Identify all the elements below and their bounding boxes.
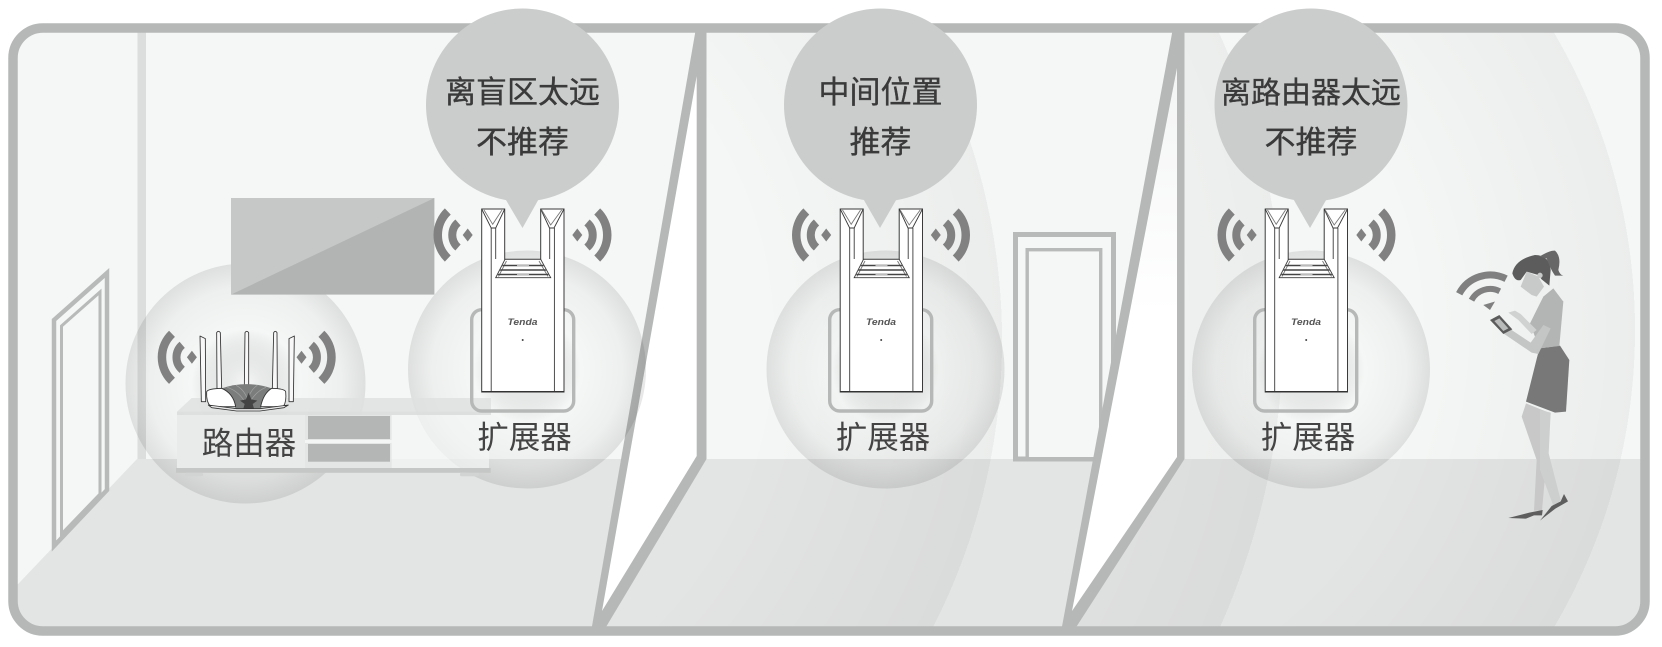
extender room 3: plug <box>1255 310 1357 411</box>
speech bubble: middle position <box>784 8 977 228</box>
speech bubble: too far from blind spot <box>426 8 619 228</box>
speech bubble: too far from router: 不推荐 <box>1264 125 1358 160</box>
extender room 2: wifi signal <box>796 212 966 258</box>
extender room 3: wifi signal <box>1222 212 1391 258</box>
extender room 2: device <box>840 209 922 392</box>
speech bubble: middle position: 推荐 <box>850 125 912 160</box>
extender room 3: device <box>1265 209 1348 392</box>
wall-mounted TV <box>231 198 434 295</box>
coverage sphere: extender room 1 <box>408 250 646 488</box>
door: left room <box>54 273 107 546</box>
signal range arc: middle room <box>916 142 1002 626</box>
speech bubble: too far from router <box>1214 8 1408 228</box>
speech bubble: too far from blind spot: 不推荐 <box>476 125 569 160</box>
speech bubble: too far from router: 离路由器太远 <box>1221 77 1401 110</box>
label: extender room 2: 扩展器 <box>836 419 930 455</box>
router <box>200 331 294 411</box>
coverage sphere: extender room 3 <box>1192 250 1430 488</box>
label: router: 路由器 <box>202 425 296 461</box>
extender room 1: device: Tenda <box>508 317 538 327</box>
signal range arcs: right room <box>1184 33 1635 626</box>
TV stand <box>176 398 491 476</box>
divider between rooms 1 and 2 <box>591 28 706 632</box>
icon: phone wifi signal <box>1459 275 1506 310</box>
speech bubble: too far from blind spot: 离盲区太远 <box>445 75 600 110</box>
wall column room 1 <box>138 28 146 459</box>
router wifi signal icon <box>162 334 331 381</box>
extender room 1: device <box>482 209 564 392</box>
extender room 3: device: Tenda <box>1291 317 1321 327</box>
coverage sphere: router <box>126 264 366 504</box>
label: extender room 3: 扩展器 <box>1261 419 1355 455</box>
floor <box>18 459 1640 626</box>
coverage sphere: extender room 2 <box>766 250 1004 488</box>
divider between rooms 2 and 3 <box>1061 28 1184 632</box>
extender room 2: device: Tenda <box>866 317 896 327</box>
person with phone <box>1490 251 1569 521</box>
extender room 2: plug <box>830 310 932 411</box>
speech bubble: middle position: 中间位置 <box>818 75 942 110</box>
extender room 1: plug <box>472 310 574 411</box>
extender room 1: wifi signal <box>438 212 607 258</box>
label: extender room 1: 扩展器 <box>477 419 572 455</box>
door: middle room <box>1016 234 1114 459</box>
